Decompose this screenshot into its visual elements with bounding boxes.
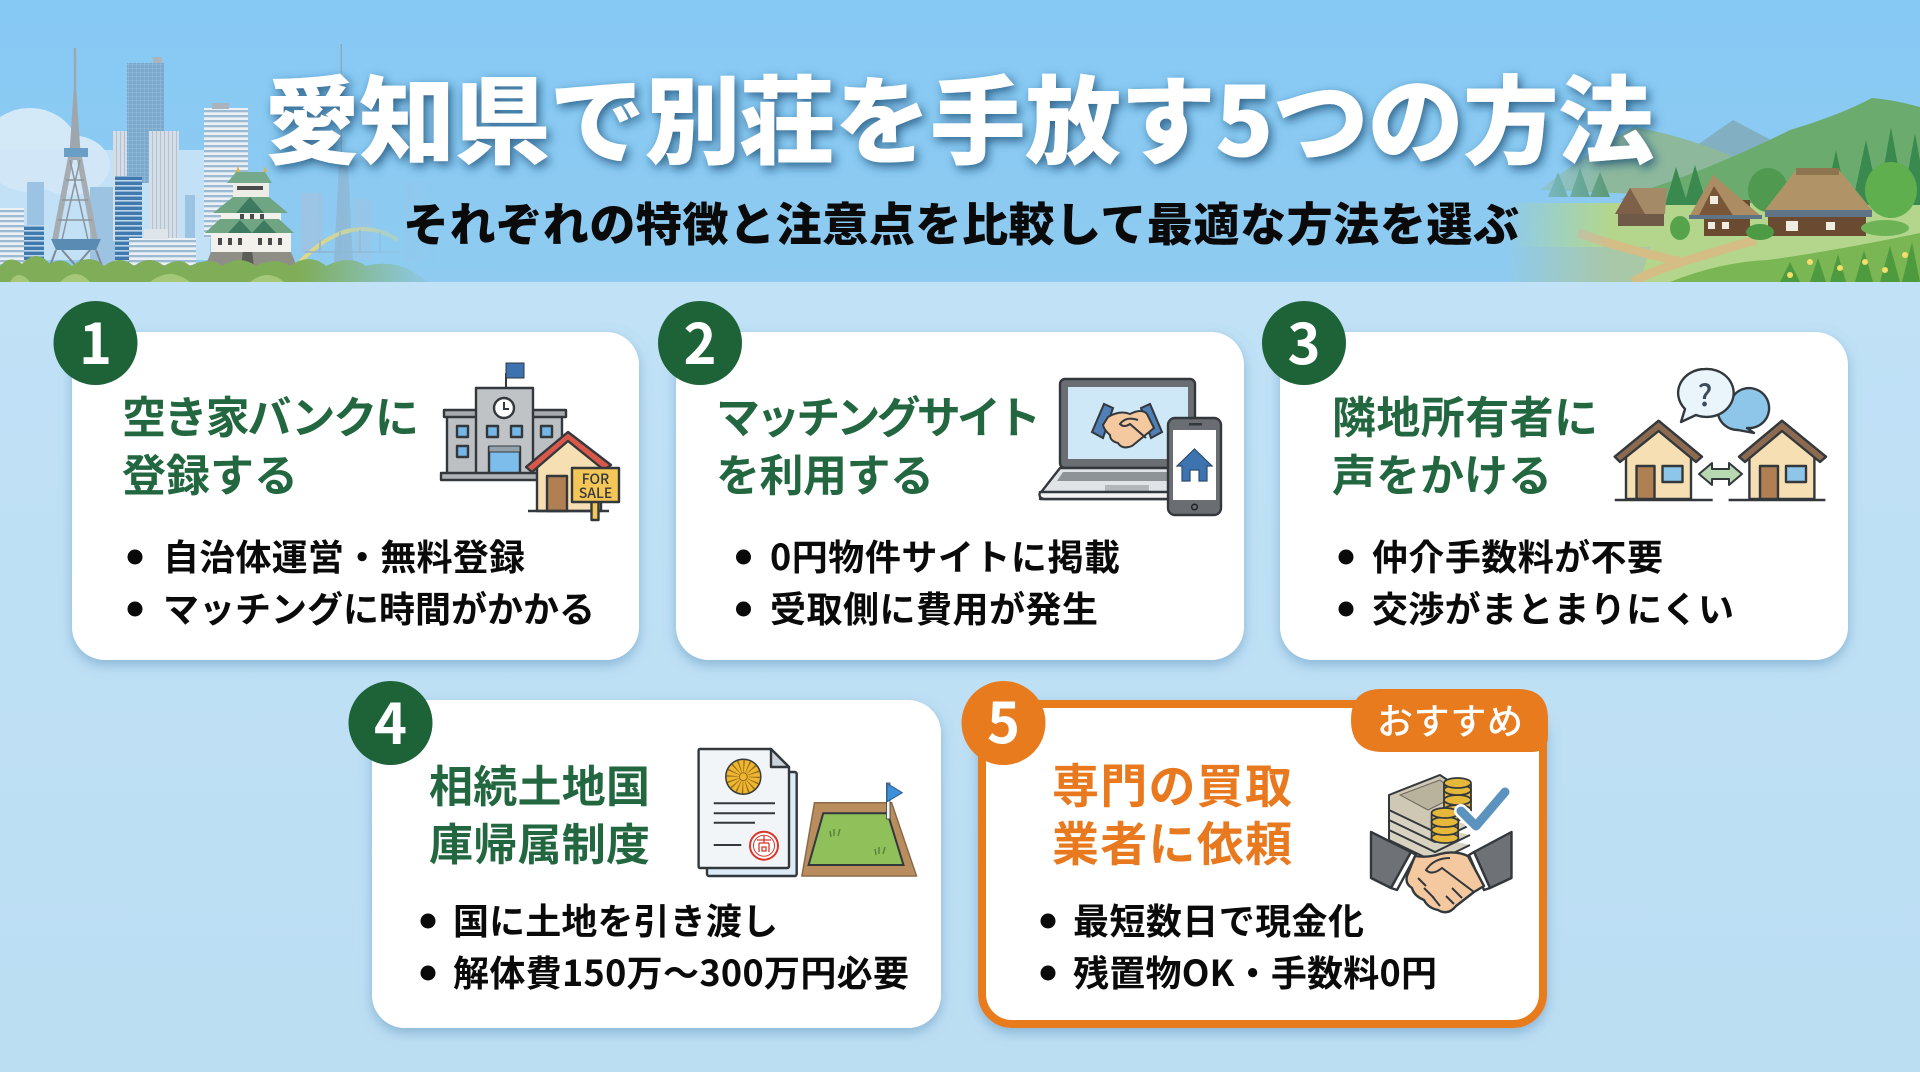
icon: certificate document and plot of land (699, 749, 916, 876)
panel: method 2 (658, 300, 1244, 660)
number badge 1 (54, 300, 138, 385)
bullet list: method 4 (420, 893, 909, 997)
heading: method 5: 専門の買取 (1052, 748, 1292, 817)
heading: method 4: 相続土地国 (429, 751, 650, 815)
bullet list: method 5: 最短数日で現金化 (1073, 893, 1364, 945)
recommended tag (1351, 689, 1548, 752)
icon: handshake on screen (1092, 404, 1162, 447)
heading: method 5: 業者に依頼 (1052, 806, 1292, 875)
number badge 4: 4 (374, 680, 407, 761)
heading: method 3: 隣地所有者に (1332, 382, 1598, 446)
header banner (0, 0, 1920, 282)
bullet list: method 4: 国に土地を引き渡し (453, 893, 778, 945)
bullet list: method 2: 受取側に費用が発生 (770, 581, 1098, 633)
bullet list: method 1: マッチングに時間がかかる (163, 581, 595, 633)
panel: method 5 (recommended) (962, 679, 1548, 1024)
recommended tag: おすすめ (1377, 693, 1523, 745)
panel: method 1 (54, 300, 639, 660)
subtitle: それぞれの特徴と注意点を比較して最適な方法を選ぶ (403, 189, 1519, 255)
bullet list: method 2 (736, 529, 1120, 633)
bullet list: method 3: 仲介手数料が不要 (1372, 529, 1663, 581)
number badge 5 (962, 679, 1046, 765)
number badge 2 (658, 300, 742, 385)
icon: money, check mark and handshake (1371, 775, 1512, 912)
number badge 2: 2 (683, 300, 717, 381)
bullet list: method 3: 交渉がまとまりにくい (1372, 581, 1734, 633)
bullet list: method 4: 解体費150万〜300万円必要 (453, 945, 909, 997)
icon: town hall and house for sale (441, 363, 619, 520)
bullet list: method 2: 0円物件サイトに掲載 (770, 529, 1120, 581)
bullet list: method 5 (1040, 893, 1437, 997)
bullet list: method 1: 自治体運営・無料登録 (163, 529, 525, 581)
bullet list: method 3 (1338, 529, 1734, 633)
heading: method 1: 登録する (122, 440, 298, 504)
heading: method 2: マッチングサイト (716, 382, 1041, 446)
heading: method 1: 空き家バンクに (122, 382, 419, 446)
panel: method 4 (348, 680, 941, 1028)
icon: town hall and house for sale: SALE (579, 483, 612, 503)
icon: town hall and house for sale: FOR (582, 469, 609, 489)
icon: two neighbouring houses with speech bubbles (1615, 369, 1826, 500)
number badge 5: 5 (987, 679, 1020, 760)
number badge 4 (348, 680, 432, 765)
illustration: Nagoya city skyline (0, 44, 434, 282)
number badge 1: 1 (79, 300, 112, 381)
bullet list: method 1 (128, 529, 595, 633)
icon: laptop and phone (1040, 379, 1221, 515)
number badge 3 (1262, 300, 1346, 385)
heading: method 2: を利用する (716, 440, 934, 504)
number badge 3: 3 (1287, 300, 1321, 381)
bullet list: method 5: 残置物OK・手数料0円 (1073, 945, 1437, 997)
icon: two neighbouring houses with speech bubbles: ? (1698, 371, 1712, 415)
heading: method 3: 声をかける (1332, 440, 1552, 504)
heading: method 4: 庫帰属制度 (429, 809, 650, 873)
panel: method 3 (1262, 300, 1848, 660)
illustration: mountain village (1500, 98, 1920, 282)
title: 愛知県で別荘を手放す5つの方法 (264, 45, 1654, 184)
